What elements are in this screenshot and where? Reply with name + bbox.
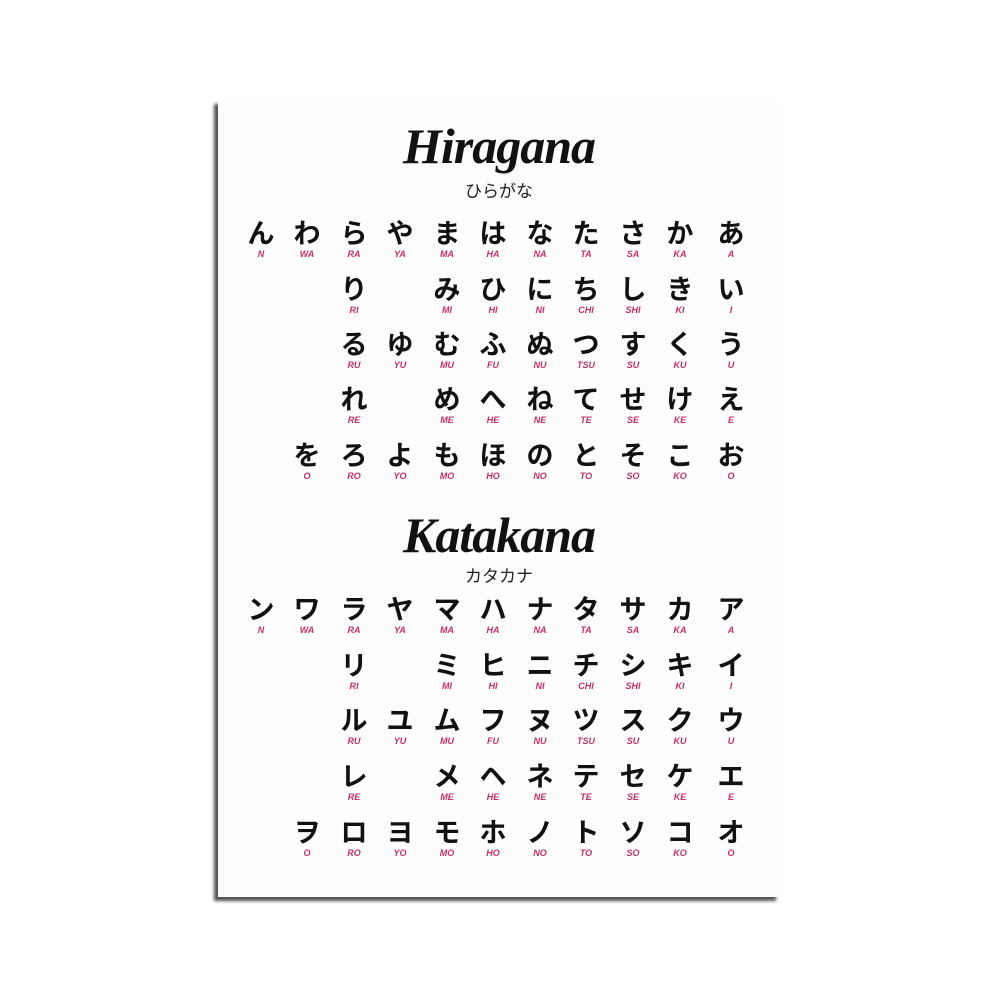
hiragana grid: MI: [442, 305, 452, 315]
hiragana grid: WA: [300, 249, 314, 259]
katakana grid: SU: [627, 736, 639, 746]
hiragana grid: ち: [572, 268, 600, 307]
hiragana grid: O: [303, 471, 310, 481]
katakana grid: ヘ: [480, 755, 506, 794]
hiragana grid: は: [480, 212, 506, 251]
katakana grid: エ: [718, 755, 744, 794]
hiragana grid: ま: [434, 212, 460, 251]
subtitle: カタカナ: カタカナ: [465, 562, 533, 587]
katakana grid: YA: [394, 625, 406, 635]
katakana grid: KA: [674, 625, 686, 635]
katakana grid: KI: [676, 681, 684, 691]
katakana grid: ハ: [480, 588, 506, 627]
hiragana grid: KU: [674, 360, 686, 370]
katakana grid: KU: [674, 736, 686, 746]
katakana grid: MA: [440, 625, 454, 635]
katakana grid: フ: [480, 699, 506, 738]
hiragana grid: せ: [620, 378, 646, 417]
katakana grid: リ: [340, 644, 368, 683]
hiragana grid: り: [340, 268, 368, 307]
katakana grid: E: [728, 792, 734, 802]
hiragana grid: し: [620, 268, 646, 307]
title: Hiragana: Hiragana: [403, 118, 595, 174]
hiragana grid: ら: [340, 212, 368, 251]
hiragana grid: き: [666, 268, 694, 307]
katakana grid: NA: [534, 625, 546, 635]
katakana grid: N: [258, 625, 264, 635]
katakana grid: セ: [620, 755, 646, 794]
hiragana grid: れ: [340, 378, 368, 417]
katakana grid: O: [727, 848, 734, 858]
katakana grid: コ: [666, 811, 694, 850]
hiragana grid: や: [386, 212, 414, 251]
subtitle: ひらがな: ひらがな: [465, 177, 533, 202]
katakana grid: ヌ: [526, 699, 554, 738]
hiragana grid: HE: [487, 415, 499, 425]
katakana grid: イ: [718, 644, 744, 683]
hiragana grid: YA: [394, 249, 406, 259]
katakana grid: ケ: [666, 755, 694, 794]
katakana grid: メ: [434, 755, 460, 794]
hiragana grid: NO: [533, 471, 547, 481]
katakana grid: ム: [434, 699, 460, 738]
hiragana grid: HO: [486, 471, 500, 481]
hiragana grid: わ: [294, 212, 320, 251]
katakana grid: TE: [580, 792, 592, 802]
katakana grid: ヤ: [386, 588, 414, 627]
hiragana grid: U: [728, 360, 734, 370]
katakana grid: ウ: [718, 699, 744, 738]
katakana grid: ワ: [294, 588, 320, 627]
hiragana grid: つ: [572, 323, 600, 362]
hiragana grid: SA: [627, 249, 639, 259]
katakana grid: SHI: [625, 681, 640, 691]
katakana grid: ス: [620, 699, 646, 738]
hiragana grid: TE: [580, 415, 592, 425]
hiragana grid: O: [727, 471, 734, 481]
hiragana grid: さ: [620, 212, 646, 251]
hiragana grid: う: [718, 323, 744, 362]
katakana grid: ソ: [620, 811, 646, 850]
katakana grid: レ: [340, 755, 368, 794]
katakana grid: キ: [666, 644, 694, 683]
katakana grid: ツ: [572, 699, 600, 738]
katakana grid: ラ: [340, 588, 368, 627]
katakana grid: TSU: [577, 736, 595, 746]
hiragana grid: ゆ: [386, 323, 414, 362]
katakana grid: HA: [486, 625, 500, 635]
katakana grid: ト: [572, 811, 600, 850]
hiragana grid: RA: [348, 249, 360, 259]
hiragana grid: お: [718, 434, 744, 473]
hiragana grid: め: [434, 378, 460, 417]
katakana grid: ユ: [386, 699, 414, 738]
hiragana grid: TO: [580, 471, 592, 481]
katakana grid: RA: [348, 625, 360, 635]
katakana grid: NE: [534, 792, 546, 802]
hiragana grid: る: [340, 323, 368, 362]
katakana grid: HO: [486, 848, 500, 858]
hiragana grid: む: [434, 323, 460, 362]
katakana grid: KE: [674, 792, 686, 802]
katakana grid: NI: [536, 681, 544, 691]
katakana grid: HI: [488, 681, 498, 691]
hiragana grid: N: [258, 249, 264, 259]
hiragana grid: YO: [393, 471, 406, 481]
katakana grid: YU: [394, 736, 406, 746]
hiragana grid: そ: [620, 434, 646, 473]
hiragana grid: よ: [386, 434, 414, 473]
hiragana grid: FU: [487, 360, 499, 370]
katakana grid: RI: [350, 681, 358, 691]
katakana grid: ナ: [526, 588, 554, 627]
katakana grid: MU: [440, 736, 454, 746]
hiragana grid: ME: [440, 415, 454, 425]
hiragana grid: HI: [488, 305, 498, 315]
hiragana grid: ほ: [480, 434, 506, 473]
hiragana grid: RU: [348, 360, 360, 370]
hiragana grid: ぬ: [526, 323, 554, 362]
hiragana grid: CHI: [578, 305, 594, 315]
hiragana grid: MA: [440, 249, 454, 259]
hiragana grid: NE: [534, 415, 546, 425]
hiragana grid: の: [526, 434, 554, 473]
hiragana grid: な: [526, 212, 554, 251]
hiragana grid: て: [572, 378, 600, 417]
hiragana grid: MU: [440, 360, 454, 370]
katakana grid: ヒ: [480, 644, 506, 683]
katakana grid: ク: [666, 699, 694, 738]
katakana grid: NO: [533, 848, 547, 858]
hiragana grid: KE: [674, 415, 686, 425]
hiragana grid: RE: [348, 415, 360, 425]
katakana grid: TO: [580, 848, 592, 858]
hiragana grid: HA: [486, 249, 500, 259]
hiragana grid: く: [666, 323, 694, 362]
hiragana grid: A: [728, 249, 734, 259]
hiragana grid: け: [666, 378, 694, 417]
hiragana grid: へ: [480, 378, 506, 417]
katakana grid: O: [303, 848, 310, 858]
katakana grid: A: [728, 625, 734, 635]
hiragana grid: KO: [673, 471, 687, 481]
hiragana grid: [248, 212, 744, 481]
hiragana grid: NA: [534, 249, 546, 259]
hiragana grid: ろ: [340, 434, 368, 473]
katakana grid: MI: [442, 681, 452, 691]
katakana grid: マ: [434, 588, 460, 627]
title: Katakana: Katakana: [403, 507, 595, 563]
hiragana grid: SHI: [625, 305, 640, 315]
hiragana grid: NU: [534, 360, 546, 370]
katakana grid: ヲ: [294, 811, 320, 850]
katakana grid: ノ: [526, 811, 554, 850]
katakana grid: ホ: [480, 811, 506, 850]
hiragana grid: と: [572, 434, 600, 473]
poster: [218, 100, 780, 897]
katakana grid: ア: [718, 588, 744, 627]
katakana grid: NU: [534, 736, 546, 746]
hiragana grid: こ: [666, 434, 694, 473]
hiragana grid: い: [718, 268, 744, 307]
katakana grid: WA: [300, 625, 314, 635]
katakana grid: ME: [440, 792, 454, 802]
hiragana grid: SU: [627, 360, 639, 370]
hiragana grid: I: [730, 305, 732, 315]
katakana grid: モ: [434, 811, 460, 850]
katakana grid: RO: [347, 848, 361, 858]
hiragana grid: も: [434, 434, 460, 473]
katakana grid: オ: [718, 811, 744, 850]
hiragana grid: ひ: [480, 268, 506, 307]
katakana grid: YO: [393, 848, 406, 858]
katakana grid: テ: [572, 755, 600, 794]
katakana grid: I: [730, 681, 732, 691]
hiragana grid: RO: [347, 471, 361, 481]
katakana grid: TA: [580, 625, 592, 635]
hiragana grid: TA: [580, 249, 592, 259]
katakana grid: RE: [348, 792, 360, 802]
hiragana grid: か: [666, 212, 694, 251]
hiragana grid: ん: [248, 212, 274, 251]
hiragana grid: MO: [440, 471, 454, 481]
hiragana grid: あ: [718, 212, 744, 251]
katakana grid: U: [728, 736, 734, 746]
hiragana grid: TSU: [577, 360, 595, 370]
katakana grid: SE: [627, 792, 639, 802]
katakana grid: MO: [440, 848, 454, 858]
katakana grid: タ: [572, 588, 600, 627]
katakana grid: ン: [248, 588, 274, 627]
katakana grid: ミ: [434, 644, 460, 683]
katakana grid: チ: [572, 644, 600, 683]
hiragana grid: す: [620, 323, 646, 362]
hiragana grid: を: [294, 434, 320, 473]
hiragana grid: KA: [674, 249, 686, 259]
hiragana grid: ふ: [480, 323, 506, 362]
katakana grid: SO: [626, 848, 640, 858]
katakana grid: ロ: [340, 811, 368, 850]
hiragana grid: み: [434, 268, 460, 307]
hiragana grid: に: [526, 268, 554, 307]
hiragana grid: NI: [536, 305, 544, 315]
hiragana grid: え: [718, 378, 744, 417]
katakana grid: ネ: [526, 755, 554, 794]
katakana grid: CHI: [578, 681, 594, 691]
katakana grid: HE: [487, 792, 499, 802]
katakana grid: ニ: [526, 644, 554, 683]
hiragana grid: た: [572, 212, 600, 251]
katakana grid: ヨ: [386, 811, 414, 850]
hiragana grid: SE: [627, 415, 639, 425]
hiragana grid: SO: [626, 471, 640, 481]
katakana grid: サ: [620, 588, 646, 627]
hiragana grid: E: [728, 415, 734, 425]
katakana grid: シ: [620, 644, 646, 683]
hiragana grid: RI: [350, 305, 358, 315]
katakana grid: FU: [487, 736, 499, 746]
hiragana grid: YU: [394, 360, 406, 370]
katakana grid: KO: [673, 848, 687, 858]
katakana grid: RU: [348, 736, 360, 746]
katakana grid: SA: [627, 625, 639, 635]
katakana grid: ル: [340, 699, 368, 738]
hiragana grid: ね: [526, 378, 554, 417]
hiragana grid: KI: [676, 305, 684, 315]
katakana grid: [248, 588, 744, 858]
katakana grid: カ: [666, 588, 694, 627]
